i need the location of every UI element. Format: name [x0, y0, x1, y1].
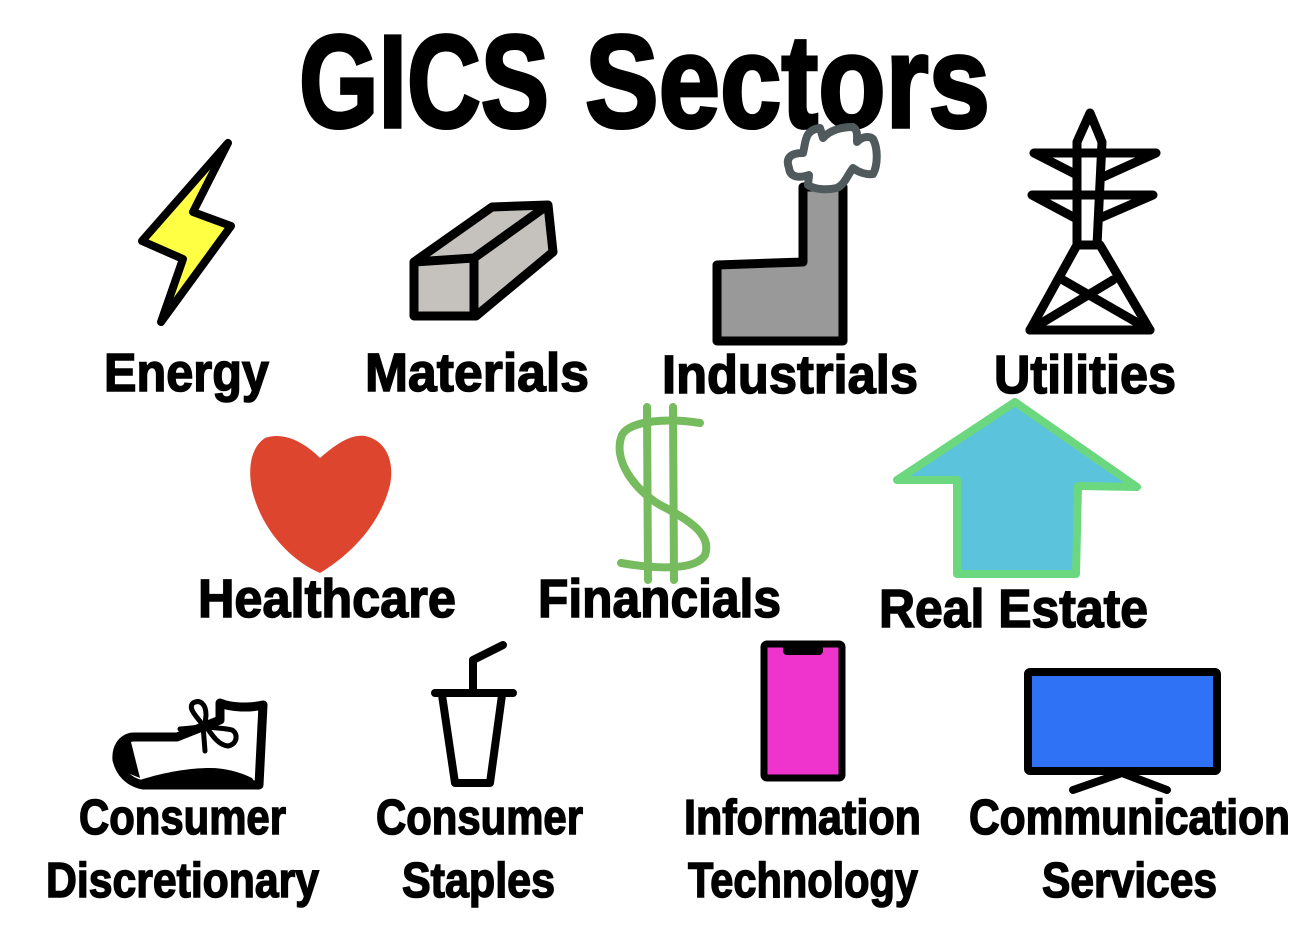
icon: material block [414, 205, 553, 316]
title [299, 8, 990, 155]
label: Consumer Staples: Consumer [376, 791, 583, 845]
label: Real Estate: Real Estate [879, 579, 1148, 639]
label: Industrials: Industrials [662, 345, 918, 405]
label: Consumer Staples [376, 791, 583, 908]
icon: smartphone [764, 644, 842, 778]
label: Communication Services [969, 791, 1290, 908]
label: Financials: Financials [538, 569, 781, 629]
label: Information Technology: Technology [688, 854, 918, 908]
label: Consumer Discretionary [46, 791, 319, 908]
icon: drink cup [435, 645, 513, 783]
icon: lightning bolt [142, 143, 231, 322]
icon: television [1028, 672, 1217, 790]
label: Consumer Discretionary: Consumer [79, 791, 286, 845]
label: Communication Services: Services [1042, 854, 1217, 908]
label: Information Technology [684, 791, 921, 908]
label: Materials: Materials [365, 343, 589, 403]
label: Energy: Energy [104, 343, 269, 403]
label: Utilities: Utilities [994, 345, 1176, 405]
icon: dollar sign [620, 407, 706, 580]
label: Information Technology: Information [684, 791, 921, 845]
icon: heart [250, 436, 391, 573]
icon: shoe [116, 702, 263, 785]
title: GICS [299, 8, 549, 155]
title: Sectors [585, 8, 990, 155]
icon: factory with smoke [717, 127, 877, 341]
label: Consumer Staples: Staples [402, 854, 555, 908]
label: Healthcare: Healthcare [198, 569, 456, 629]
label: Consumer Discretionary: Discretionary [46, 854, 319, 908]
icon: power pylon [1030, 113, 1156, 330]
icon: house arrow [897, 402, 1137, 574]
